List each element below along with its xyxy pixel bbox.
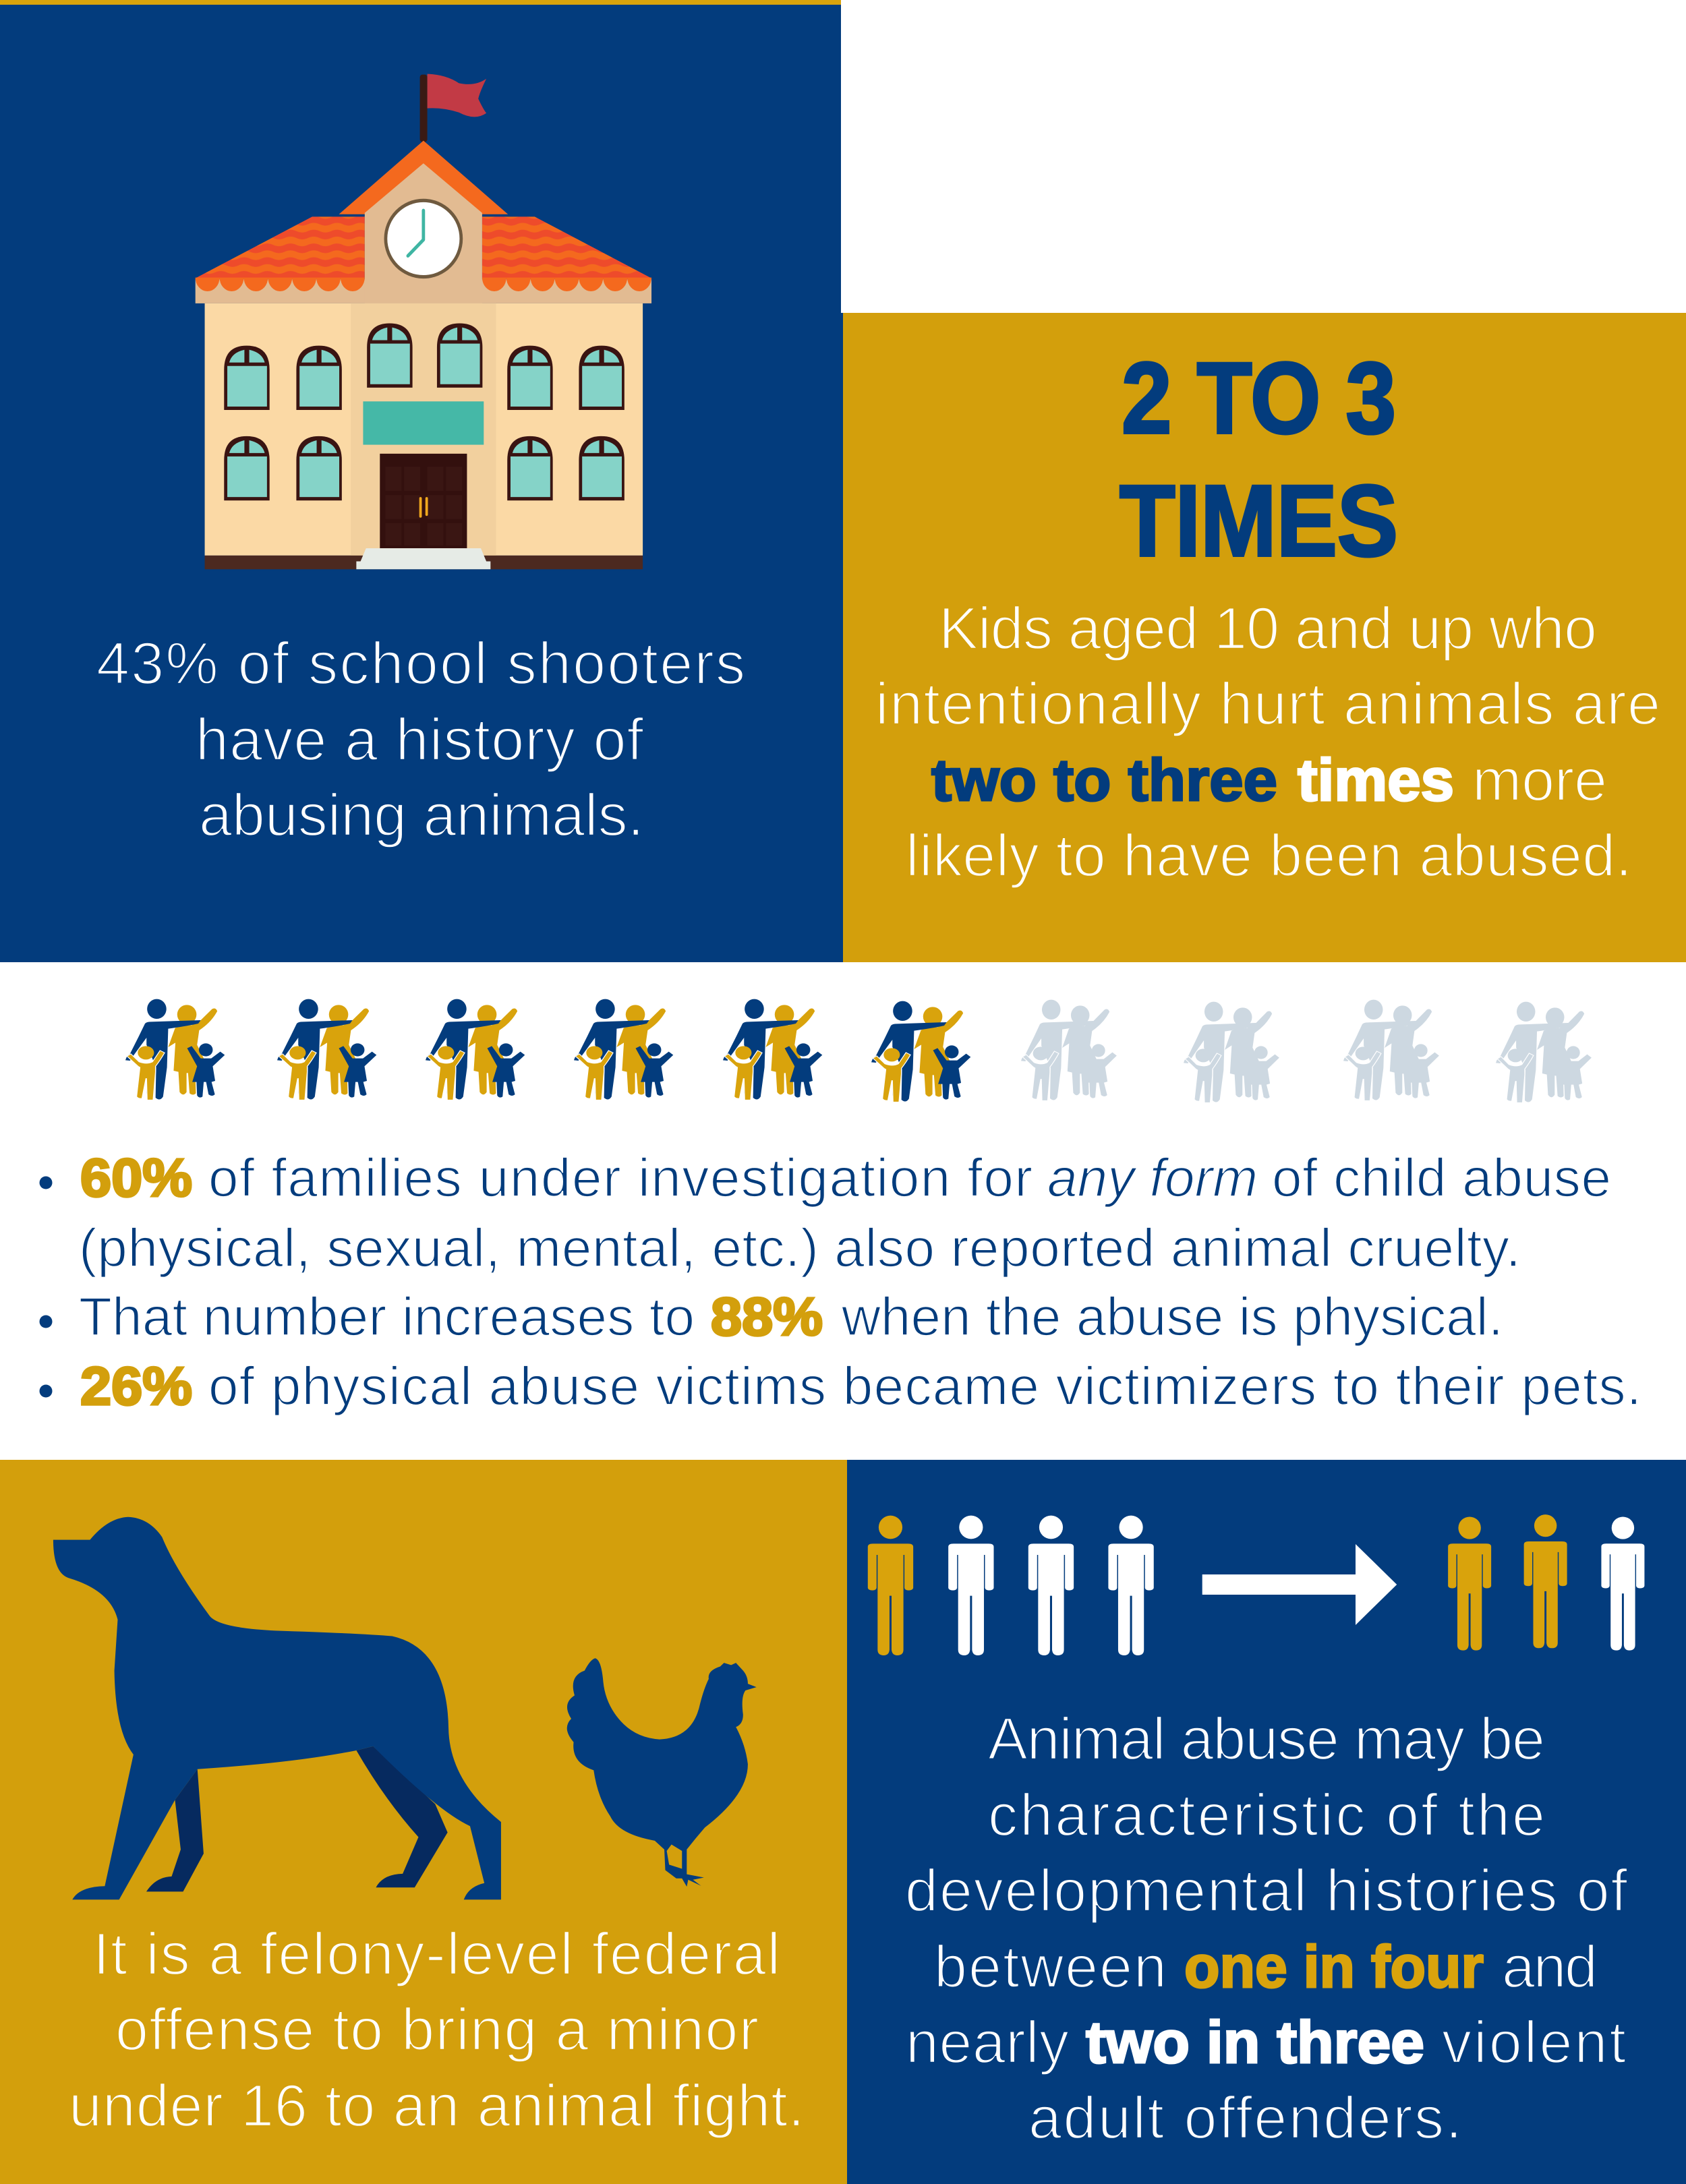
panel: school shooters [0,0,843,962]
bullet list: family statistics: 60% [80,1148,192,1208]
bullet list: family statistics: (physical, sexual, mental, etc.) also reported animal cruelty. [79,1218,1521,1278]
text: kids aged 10 and up: Kids aged 10 and up who [939,595,1597,661]
text: kids aged 10 and up: times [1298,746,1454,813]
text: kids aged 10 and up [875,595,1660,889]
panel: family statistics [0,962,1686,1460]
icon: family 6 [871,1001,970,1102]
text: animal abuse may be characteristic: developmental histories of [905,1857,1628,1924]
text: 43% of school shooters: 43% of school shooters [96,630,745,697]
text: animal abuse may be characteristic: between [934,1933,1167,2000]
text: animal abuse may be characteristic: characteristic of the [988,1781,1545,1848]
icon: school building [196,74,651,569]
bullet list: family statistics: when the abuse is physical. [841,1287,1503,1347]
bullet list: family statistics: any form [1047,1148,1258,1208]
icon: grey family 7 [1021,1000,1117,1100]
icon: dog and chicken [53,1517,757,1899]
text: kids aged 10 and up: more [1472,746,1607,813]
icon: grey family 9 [1343,1000,1439,1100]
bullet list: family statistics [39,1148,1641,1416]
text: felony-level federal offense: offense to bring a minor [115,1996,759,2063]
panel: violent offenders [847,1460,1686,2184]
heading: 2 to 3 times [1120,341,1398,577]
text: 43% of school shooters [96,630,745,848]
text: animal abuse may be characteristic: and [1502,1933,1598,2000]
school windows [224,323,624,500]
icon: chicken [567,1658,757,1887]
text: felony-level federal offense: under 16 to an animal fight. [69,2072,805,2139]
bullet list: family statistics: of families under investigation for [208,1148,1033,1208]
text: 43% of school shooters: abusing animals. [199,781,644,848]
text: kids aged 10 and up: two to three [931,746,1277,813]
icon: dog [53,1517,501,1899]
bullet list: family statistics: 88% [711,1287,823,1347]
icon: family 2 [277,999,376,1100]
panel: 2 to 3 times [843,313,1686,962]
icon: flag [420,74,486,142]
icon: grey family 8 [1184,1002,1279,1102]
icon: clock [384,199,463,278]
school door [380,454,467,548]
text: kids aged 10 and up: likely to have been abused. [906,822,1632,889]
text: animal abuse may be characteristic: adult offenders. [1028,2084,1462,2151]
text: kids aged 10 and up: intentionally hurt animals are [875,670,1660,737]
text: animal abuse may be characteristic: one in four [1184,1933,1484,2000]
bullet list: family statistics: of physical abuse victims became victimizers to their pets. [208,1356,1641,1416]
top accent line [0,0,841,5]
icon: family 5 [723,999,822,1100]
heading: 2 to 3 times: TIMES [1120,464,1398,577]
heading: 2 to 3 times: 2 TO 3 [1122,341,1396,454]
panel: felony offense [0,1460,847,2184]
icon: family 3 [426,999,525,1100]
text: felony-level federal offense [69,1920,805,2139]
icon: one in four people [868,1516,1154,1655]
icon: grey family 10 [1496,1002,1592,1102]
bullet list: family statistics: That number increases to [79,1287,695,1347]
text: animal abuse may be characteristic [905,1705,1628,2151]
bullet list: family statistics: of child abuse [1272,1148,1611,1208]
text: animal abuse may be characteristic: Animal abuse may be [988,1705,1545,1772]
text: animal abuse may be characteristic: violent [1442,2009,1626,2075]
icon: family 1 [125,999,225,1100]
icon row: families, six of ten highlighted [125,999,1592,1102]
bullet list: family statistics: 26% [80,1356,192,1416]
text: animal abuse may be characteristic: two in three [1086,2009,1424,2075]
icon: two in three people [1448,1514,1644,1651]
icon row: people and arrow [868,1514,1644,1655]
icon: family 4 [574,999,673,1100]
text: animal abuse may be characteristic: nearly [906,2009,1069,2075]
text: 43% of school shooters: have a history of [196,706,644,773]
text: felony-level federal offense: It is a felony-level federal [93,1920,780,1987]
arrow [1202,1544,1397,1625]
